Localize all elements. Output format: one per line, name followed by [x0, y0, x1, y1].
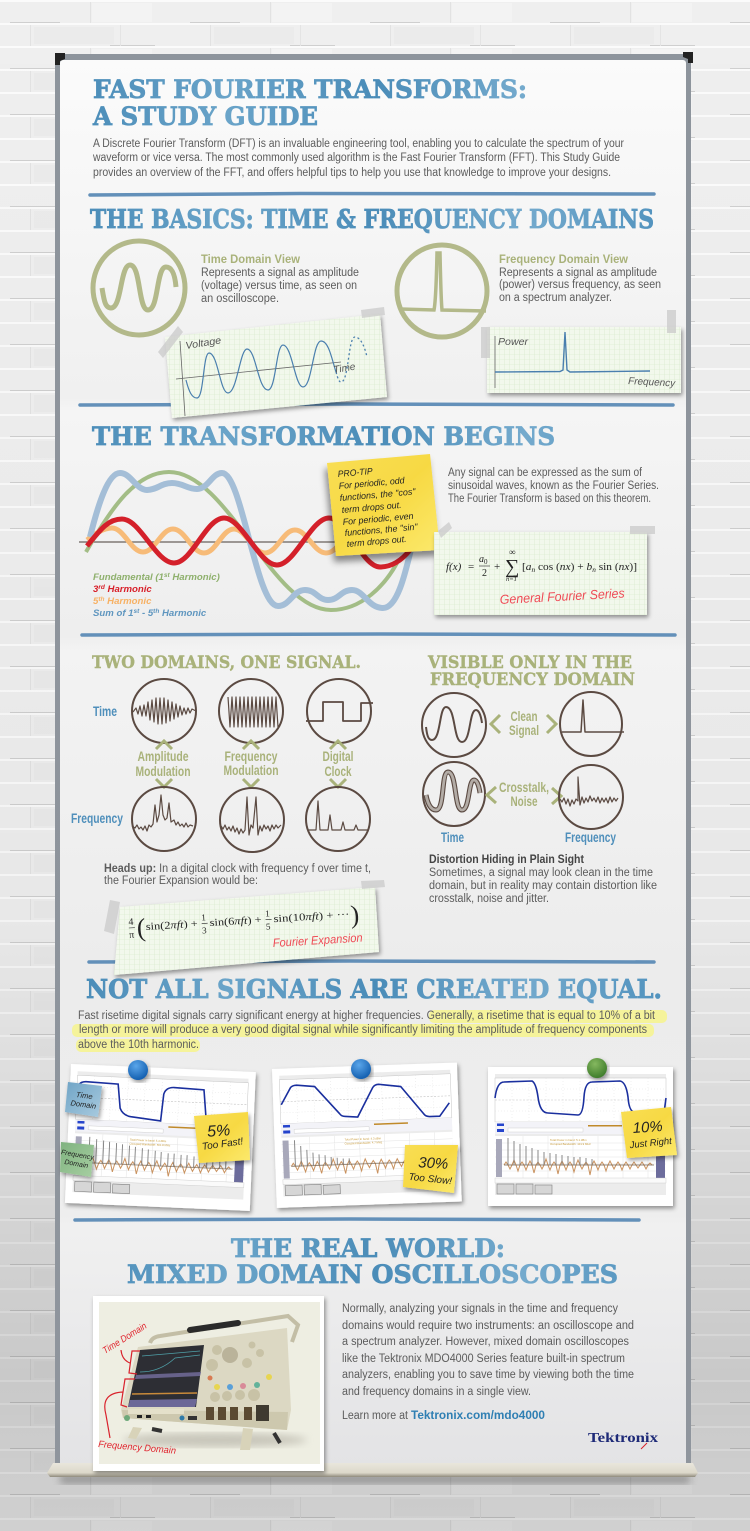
- time domain view text: an oscilloscope.: [201, 293, 279, 305]
- graph note: general fourier series: sin (nx)]: [599, 561, 637, 573]
- push pin: green: [587, 1058, 607, 1078]
- sticky note: 5% too fast: Too Fast!: [201, 1136, 244, 1153]
- frequency domain view text: on a spectrum analyzer.: [499, 292, 612, 304]
- sticky note: pro-tip: [327, 454, 440, 556]
- time domain view text: Time Domain View: [201, 254, 300, 266]
- sticky note: 10% just right: [621, 1107, 677, 1158]
- legend: Harmonic: [159, 608, 207, 619]
- icon: amplitude modulation frequency: [132, 787, 196, 851]
- graph note: general fourier series: 0: [484, 558, 488, 566]
- distortion text: Distortion Hiding in Plain Sight: [429, 854, 584, 866]
- photo: mixed domain oscilloscope: [93, 1296, 324, 1471]
- icon: frequency domain circle: [397, 245, 487, 337]
- graph note: fourier expansion: 3: [202, 925, 207, 936]
- crosstalk noise label: [487, 780, 561, 809]
- icon: digital clock time: [306, 679, 373, 743]
- graph note: fourier expansion: sin(6 πft) +: [209, 915, 262, 929]
- legend: Harmonic: [104, 596, 152, 607]
- time domain view text: Represents a signal as amplitude: [201, 267, 359, 279]
- distortion text: domain, but in reality may contain distortion like: [429, 880, 657, 892]
- digital clock label: Digital: [322, 749, 354, 764]
- frequency domain view text: (power) versus frequency, as seen: [499, 279, 661, 291]
- legend: 3: [93, 584, 98, 595]
- sticky note: time domain: [65, 1082, 102, 1117]
- graph note: fourier expansion: (: [136, 913, 146, 942]
- graph note: fourier expansion: 5: [266, 921, 271, 932]
- paragraph with highlight: [72, 1010, 667, 1052]
- legend: Harmonic): [170, 572, 220, 583]
- icon: time domain circle: [93, 241, 185, 335]
- fourier series text: [448, 467, 659, 505]
- frequency modulation label: Modulation: [224, 763, 278, 778]
- graph note: general fourier series: cos (nx) + b: [538, 561, 592, 573]
- intro paragraph: waveform or vice versa. The most commonly used algorithm is the Fast Fourier Transform (FFT). This Study Guide: [92, 152, 620, 164]
- legend: - 5: [139, 608, 154, 619]
- legend: th: [153, 608, 159, 615]
- heading: the real world: MIXED DOMAIN OSCILLOSCOPES: [127, 1260, 618, 1289]
- sticky note: frequency domain: [60, 1142, 95, 1177]
- sticky note: pro-tip: PRO-TIP: [337, 466, 373, 479]
- clean signal label: Signal: [509, 723, 539, 738]
- heading: visible only in frequency domain: [427, 653, 635, 690]
- sticky note: 5% too fast: [194, 1112, 250, 1163]
- photo: 5% too fast: Total Power in band: 5.4 dBm: [130, 1138, 167, 1143]
- heading: two domains: TWO DOMAINS, ONE SIGNAL.: [92, 653, 361, 673]
- icon: clean signal time: [422, 693, 486, 757]
- icon: frequency modulation frequency: [220, 788, 284, 852]
- real world text: [342, 1303, 634, 1398]
- whiteboard poster frame: [55, 52, 693, 1484]
- intro paragraph: provides an overview of the FFT, and offers helpful tips to help you use that knowledge to improve your designs.: [93, 167, 611, 179]
- frequency domain view text: [499, 254, 661, 304]
- graph note: fourier expansion: ): [350, 900, 360, 929]
- sticky note: time domain: Time: [75, 1090, 93, 1101]
- graph note: general fourier series: n: [592, 566, 596, 574]
- digital clock label: Clock: [324, 764, 352, 779]
- photo: 10% just right: Total Power in band: 5.1 dBm: [550, 1138, 587, 1142]
- push pin: blue: [351, 1059, 371, 1079]
- graph note: fourier expansion: [104, 880, 385, 975]
- column label: frequency: Frequency: [565, 830, 616, 845]
- amplitude modulation label: Amplitude: [138, 749, 189, 764]
- sticky note: pro-tip: term drops out.: [346, 534, 407, 549]
- legend: st: [134, 608, 140, 615]
- icon: noisy signal time: [423, 762, 485, 826]
- sticky note: pro-tip: functions, the "sin": [344, 522, 419, 538]
- intro paragraph: A Discrete Fourier Transform (DFT) is an invaluable engineering tool, enabling you to calculate the spectrum of your: [93, 138, 624, 150]
- graph note: general fourier series: =: [468, 561, 474, 573]
- learn more link: Learn more at: [342, 1410, 409, 1422]
- fourier series text: sinusoidal waves, known as the Fourier Series.: [448, 480, 659, 492]
- heading: visible only in frequency domain: VISIBLE ONLY IN THE: [427, 653, 632, 673]
- clean signal label: [491, 709, 556, 738]
- graph note: general fourier series: n=1: [506, 576, 517, 583]
- legend: rd: [98, 584, 106, 591]
- legend: Sum of 1: [93, 608, 134, 619]
- real world text: a spectrum analyzer. However, mixed domain oscilloscopes: [342, 1336, 629, 1348]
- push pin: blue: [128, 1060, 148, 1080]
- column label: time: Time: [441, 830, 464, 845]
- heads up text: [104, 863, 371, 887]
- distortion text: [429, 854, 657, 905]
- sticky note: pro-tip: functions, the "cos": [339, 486, 417, 503]
- graph note: fourier expansion: 4: [128, 917, 134, 928]
- heading: the transformation begins: THE TRANSFORMATION BEGINS: [92, 422, 555, 451]
- graph note: general fourier series: n: [532, 566, 536, 574]
- photo: 5% too fast: [65, 1064, 256, 1211]
- real world text: analyzers, enabling you to save time by viewing both the time: [342, 1369, 634, 1381]
- legend: Harmonic: [105, 584, 152, 595]
- frequency domain view text: Represents a signal as amplitude: [499, 267, 657, 279]
- graph note: voltage vs time: [158, 307, 387, 418]
- real world text: Normally, analyzing your signals in the time and frequency: [342, 1303, 618, 1315]
- graph note: power vs frequency: [481, 310, 681, 393]
- whiteboard tray: [47, 1463, 698, 1477]
- heading: the real world: THE REAL WORLD:: [231, 1234, 505, 1263]
- graph note: fourier expansion: 1: [201, 912, 206, 923]
- legend: st: [164, 572, 171, 579]
- graph note: voltage vs time: Voltage: [185, 335, 222, 352]
- row label: frequency: Frequency: [71, 811, 123, 826]
- graph note: general fourier series: f(x): [446, 561, 462, 573]
- red annotations: [98, 1321, 176, 1457]
- frequency modulation label: [224, 741, 278, 787]
- icon: frequency modulation time: [219, 679, 283, 743]
- distortion text: crosstalk, noise and jitter.: [429, 893, 549, 905]
- graph note: fourier expansion: sin(10 πft) + ···: [273, 910, 350, 925]
- graph note: general fourier series: [a: [522, 561, 531, 573]
- logo: tektronix: [588, 1431, 658, 1449]
- photo: 10% just right: Occupied Bandwidth: 101.9 MHz: [550, 1142, 591, 1146]
- real world text: like the Tektronix MDO4000 Series feature built-in spectrum: [342, 1353, 625, 1365]
- paragraph with highlight: length or more will produce a very good digital signal while significantly limiting the amplitude of frequency components: [79, 1024, 647, 1036]
- paragraph with highlight: Fast risetime digital signals carry significant energy at higher frequencies. Generally, a risetime that is equal to 10% of a bit: [78, 1010, 656, 1022]
- learn more link: Tektronix.com/mdo4000: [411, 1410, 545, 1422]
- photo: 30% too slow: [272, 1063, 462, 1208]
- graph note: general fourier series: 2: [482, 568, 487, 579]
- learn more link: [342, 1410, 545, 1422]
- sticky note: frequency domain: Domain: [64, 1159, 89, 1170]
- graph note: fourier expansion: 1: [265, 908, 270, 919]
- main title: [92, 75, 527, 131]
- photo: 30% too slow: Occupied Bandwidth: 4.7 MHz: [345, 1140, 383, 1146]
- graph note: general fourier series: ∞: [509, 547, 515, 557]
- amplitude modulation label: [136, 741, 190, 787]
- legend: th: [98, 596, 105, 603]
- red annotations: Frequency Domain: [98, 1439, 176, 1457]
- time domain view text: (voltage) versus time, as seen on: [201, 280, 357, 292]
- logo: tektronix: Tektronix: [588, 1431, 658, 1446]
- graph note: fourier expansion: Fourier Expansion: [272, 931, 363, 950]
- main title: FAST FOURIER TRANSFORMS:: [93, 75, 527, 104]
- graph note: power vs frequency: Frequency: [628, 376, 676, 390]
- graph note: general fourier series: a: [479, 554, 484, 565]
- sticky note: 30% too slow: [403, 1145, 458, 1193]
- graph note: general fourier series: +: [494, 561, 500, 573]
- sticky note: 30% too slow: Too Slow!: [408, 1172, 453, 1187]
- heads up text: Heads up: In a digital clock with frequency f over time t,: [104, 863, 371, 875]
- sticky note: time domain: Domain: [70, 1098, 97, 1111]
- sticky note: pro-tip: For periodic, odd: [338, 475, 406, 491]
- photo: 30% too slow: Total Power in band: 4.3 dBm: [344, 1136, 382, 1142]
- fourier series text: Any signal can be expressed as the sum of: [448, 467, 643, 479]
- graph note: general fourier series: ∑: [505, 556, 519, 578]
- sticky note: pro-tip: term drops out.: [341, 500, 402, 515]
- photo: 10% just right: [488, 1067, 673, 1206]
- heading: the real world: [127, 1234, 618, 1289]
- time domain view text: [201, 254, 359, 305]
- legend: Fundamental (1: [93, 572, 164, 583]
- sticky note: 10% just right: 10%: [632, 1118, 663, 1137]
- icon: amplitude modulation time: [132, 679, 196, 743]
- chart: harmonics waves: [79, 472, 415, 610]
- amplitude modulation label: Modulation: [136, 764, 190, 779]
- heads up text: the Fourier Expansion would be:: [104, 875, 258, 887]
- row label: time: Time: [93, 704, 117, 719]
- fourier series text: The Fourier Transform is based on this theorem.: [448, 493, 651, 505]
- main title: A STUDY GUIDE: [92, 102, 318, 131]
- icon: clean signal frequency: [560, 692, 624, 756]
- graph note: power vs frequency: Power: [498, 337, 529, 348]
- heading: visible only in frequency domain: FREQUENCY DOMAIN: [430, 670, 635, 690]
- frequency modulation label: Frequency: [224, 749, 278, 764]
- heading: not all signals: NOT ALL SIGNALS ARE CREATED EQUAL.: [86, 975, 662, 1005]
- heading: the basics: THE BASICS: TIME & FREQUENCY DOMAINS: [90, 205, 654, 235]
- graph note: general fourier series: [434, 522, 655, 615]
- sticky note: frequency domain: Frequency: [60, 1149, 95, 1162]
- distortion text: Sometimes, a signal may look clean in the time: [429, 867, 653, 879]
- red annotations: Time Domain: [101, 1321, 149, 1357]
- legend: 5: [93, 596, 98, 607]
- knobs and controls: [124, 1342, 272, 1421]
- icon: noisy signal frequency: [559, 765, 623, 829]
- crosstalk noise label: Noise: [510, 794, 538, 809]
- graph note: voltage vs time: Time: [333, 362, 357, 376]
- sticky note: 10% just right: Just Right: [628, 1136, 673, 1151]
- photo: 5% too fast: Occupied Bandwidth: 501.8 MHz: [129, 1142, 171, 1147]
- sticky note: 5% too fast: 5%: [207, 1122, 231, 1141]
- legend: [93, 572, 220, 619]
- digital clock label: [322, 741, 354, 787]
- graph note: fourier expansion: sin(2 πft) +: [145, 919, 198, 933]
- sticky note: pro-tip: For periodic, even: [342, 511, 414, 527]
- paragraph with highlight: above the 10th harmonic.: [78, 1039, 199, 1051]
- graph note: general fourier series: General Fourier Series: [499, 585, 625, 607]
- intro paragraph: [92, 138, 624, 179]
- real world text: and frequency domains in a single view.: [342, 1386, 531, 1398]
- sticky note: 30% too slow: 30%: [418, 1154, 449, 1173]
- icon: digital clock frequency: [306, 787, 370, 851]
- crosstalk noise label: Crosstalk,: [499, 780, 549, 795]
- clean signal label: Clean: [510, 709, 538, 724]
- frequency domain view text: Frequency Domain View: [499, 254, 628, 266]
- real world text: domains would require two instruments: an oscilloscope and: [342, 1320, 634, 1332]
- graph note: fourier expansion: π: [129, 930, 135, 941]
